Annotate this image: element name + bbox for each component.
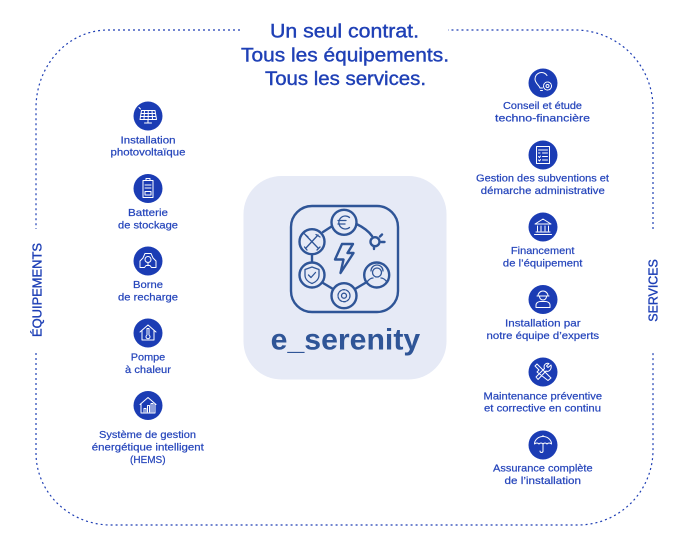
label: (HEMS)	[130, 454, 166, 466]
service: installation	[487, 285, 599, 342]
label: Borne	[133, 279, 163, 291]
title: Tous les équipements.	[241, 44, 449, 66]
label: et corrective en continu	[484, 403, 601, 415]
logo icon: support person	[364, 262, 389, 288]
equipment: heat pump	[125, 318, 172, 376]
equipment: battery	[118, 174, 178, 231]
logo frame	[291, 206, 398, 312]
icon: battery	[134, 174, 162, 203]
label: Système de gestion	[99, 429, 196, 441]
service: consulting	[495, 68, 590, 125]
logo icon: lightning bolt	[335, 244, 354, 273]
label: démarche administrative	[481, 185, 605, 197]
label	[118, 279, 178, 304]
icon: house energy chart	[134, 391, 162, 420]
label	[484, 390, 602, 415]
label: Assurance complète	[493, 463, 593, 475]
label: de l’équipement	[503, 258, 583, 270]
label	[476, 173, 609, 197]
service: insurance	[493, 430, 593, 487]
label	[92, 429, 204, 466]
logo connecting ring	[312, 224, 372, 289]
icon: EV charger	[134, 246, 162, 276]
label	[487, 318, 599, 342]
equipment: photovoltaic	[110, 102, 186, 159]
icon: solar panel	[134, 102, 162, 130]
label: Conseil et étude	[503, 100, 582, 112]
equipment: charging point	[118, 246, 178, 304]
icon: house thermometer	[134, 318, 162, 348]
label	[125, 352, 172, 376]
label: Maintenance préventive	[484, 390, 602, 402]
label	[503, 245, 583, 270]
label	[493, 463, 593, 487]
logo icon: euro	[332, 210, 356, 235]
label	[118, 207, 178, 231]
service: financing	[503, 212, 583, 270]
label: de recharge	[118, 292, 178, 304]
equipment: HEMS	[92, 391, 204, 466]
label: de stockage	[118, 219, 178, 231]
logo icon: plug	[370, 234, 384, 249]
label: Financement	[511, 245, 575, 257]
label: photovoltaïque	[110, 147, 186, 159]
icon: bank	[528, 212, 558, 242]
service: maintenance	[484, 358, 602, 415]
panel: e_serenity logo	[244, 176, 446, 380]
icon: bulb and gear	[528, 68, 558, 98]
label: Installation	[120, 134, 176, 146]
icon: checklist	[528, 140, 558, 170]
label: énergétique intelligent	[92, 441, 204, 453]
logo icon: tools	[300, 229, 324, 254]
label: techno-financière	[495, 113, 590, 125]
label: Installation par	[505, 318, 581, 330]
label: Pompe	[131, 352, 165, 364]
logo icon: gear	[332, 283, 356, 308]
label	[495, 100, 590, 125]
label: notre équipe d’experts	[487, 330, 599, 342]
title: Tous les services.	[265, 68, 426, 90]
icon: worker	[528, 285, 558, 314]
label	[110, 134, 186, 159]
label: à chaleur	[125, 364, 172, 376]
logo icon: shield	[300, 262, 324, 288]
label: de l’installation	[505, 475, 581, 487]
icon: tools	[528, 358, 558, 386]
side label: équipements: ÉQUIPEMENTS	[30, 243, 44, 337]
title	[241, 20, 449, 90]
title: Un seul contrat.	[270, 20, 419, 42]
service: subsidies	[476, 140, 609, 197]
side label: services: SERVICES	[646, 259, 660, 322]
logo wordmark: e_serenity	[271, 324, 421, 356]
label: Gestion des subventions et	[476, 173, 609, 185]
label: Batterie	[128, 207, 168, 219]
icon: umbrella	[528, 430, 558, 460]
